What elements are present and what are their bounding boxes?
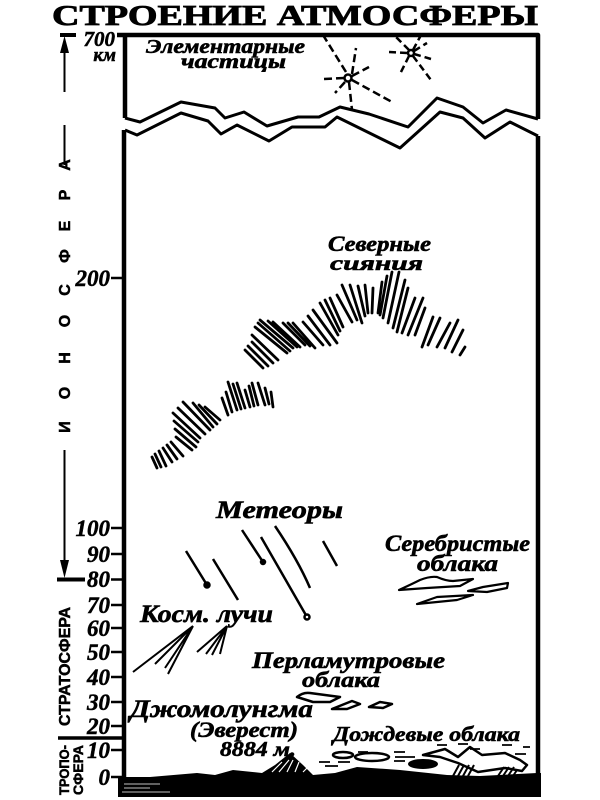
label: northern lights: сияния bbox=[330, 251, 423, 275]
panel: main atmosphere frame bbox=[124, 112, 538, 795]
icon: rain clouds bbox=[319, 744, 530, 776]
ionosphere label: О bbox=[57, 315, 74, 327]
panel: upper atmosphere frame bbox=[117, 35, 538, 127]
altitude scale: 200 bbox=[74, 266, 110, 291]
ionosphere label: А bbox=[57, 159, 74, 171]
altitude scale: 30 bbox=[86, 690, 110, 715]
altitude scale: 70 bbox=[87, 593, 110, 618]
label: rain clouds: Дождевые облака bbox=[331, 722, 520, 746]
label: Everest: Джомолунгма bbox=[128, 696, 313, 723]
altitude scale: 90 bbox=[87, 542, 110, 567]
label: cosmic rays: Косм. лучи bbox=[139, 601, 273, 628]
troposphere label: ТРОПО- bbox=[56, 745, 72, 795]
label: Everest: (Эверест) bbox=[190, 717, 298, 742]
ionosphere label: Ф bbox=[57, 249, 74, 263]
chart: aurora band bbox=[152, 272, 465, 468]
label: Everest: 8884 м. bbox=[220, 737, 296, 761]
altitude scale: 0 bbox=[98, 765, 110, 790]
label: noctilucent clouds: облака bbox=[417, 551, 498, 576]
label: noctilucent clouds: Серебристые bbox=[385, 531, 530, 556]
label: meteors: Метеоры bbox=[215, 497, 343, 524]
ionosphere label: Р bbox=[57, 189, 74, 200]
chart: meteor trails bbox=[186, 526, 337, 620]
stratosphere label: СТРАТОСФЕРА bbox=[57, 607, 74, 726]
icon: noctilucent clouds bbox=[399, 577, 508, 604]
icon: nacreous clouds bbox=[297, 693, 392, 709]
label: elementary particles: частицы bbox=[181, 51, 286, 73]
label: nacreous clouds: Перламутровые bbox=[251, 648, 445, 673]
ionosphere label: И bbox=[57, 421, 74, 433]
altitude scale: 80 bbox=[87, 567, 110, 592]
altitude scale: 700 bbox=[84, 27, 116, 51]
altitude scale: 20 bbox=[86, 714, 110, 739]
altitude scale: 10 bbox=[87, 738, 110, 763]
label: nacreous clouds: облака bbox=[302, 667, 380, 692]
altitude scale: 40 bbox=[86, 665, 110, 690]
label: northern lights bbox=[328, 231, 431, 275]
ground and mountains bbox=[118, 753, 541, 797]
troposphere label: СФЕРА bbox=[70, 745, 86, 795]
label: elementary particles: Элементарные bbox=[146, 36, 305, 58]
icon: particle star right bbox=[388, 35, 431, 80]
altitude scale: 50 bbox=[87, 640, 110, 665]
ionosphere scale arrow bbox=[57, 35, 85, 580]
label: Everest bbox=[128, 696, 313, 761]
icon: particle star left bbox=[323, 35, 392, 110]
label: nacreous clouds bbox=[251, 648, 445, 692]
ionosphere label: О bbox=[57, 387, 74, 399]
altitude scale bbox=[74, 27, 122, 790]
ionosphere label bbox=[57, 159, 74, 433]
ionosphere label: Н bbox=[57, 352, 74, 364]
altitude scale: 100 bbox=[76, 516, 110, 541]
label: elementary particles bbox=[146, 36, 305, 73]
label: northern lights: Северные bbox=[328, 231, 431, 256]
ionosphere label: Е bbox=[57, 220, 74, 231]
label: noctilucent clouds bbox=[385, 531, 530, 576]
troposphere label bbox=[56, 745, 86, 795]
stratosphere boundary bbox=[58, 736, 122, 740]
icon: cosmic ray showers bbox=[133, 626, 227, 674]
ionosphere label: С bbox=[57, 284, 74, 296]
altitude scale: км bbox=[93, 45, 116, 66]
altitude scale: 60 bbox=[87, 616, 110, 641]
title: СТРОЕНИЕ АТМОСФЕРЫ bbox=[52, 0, 538, 32]
